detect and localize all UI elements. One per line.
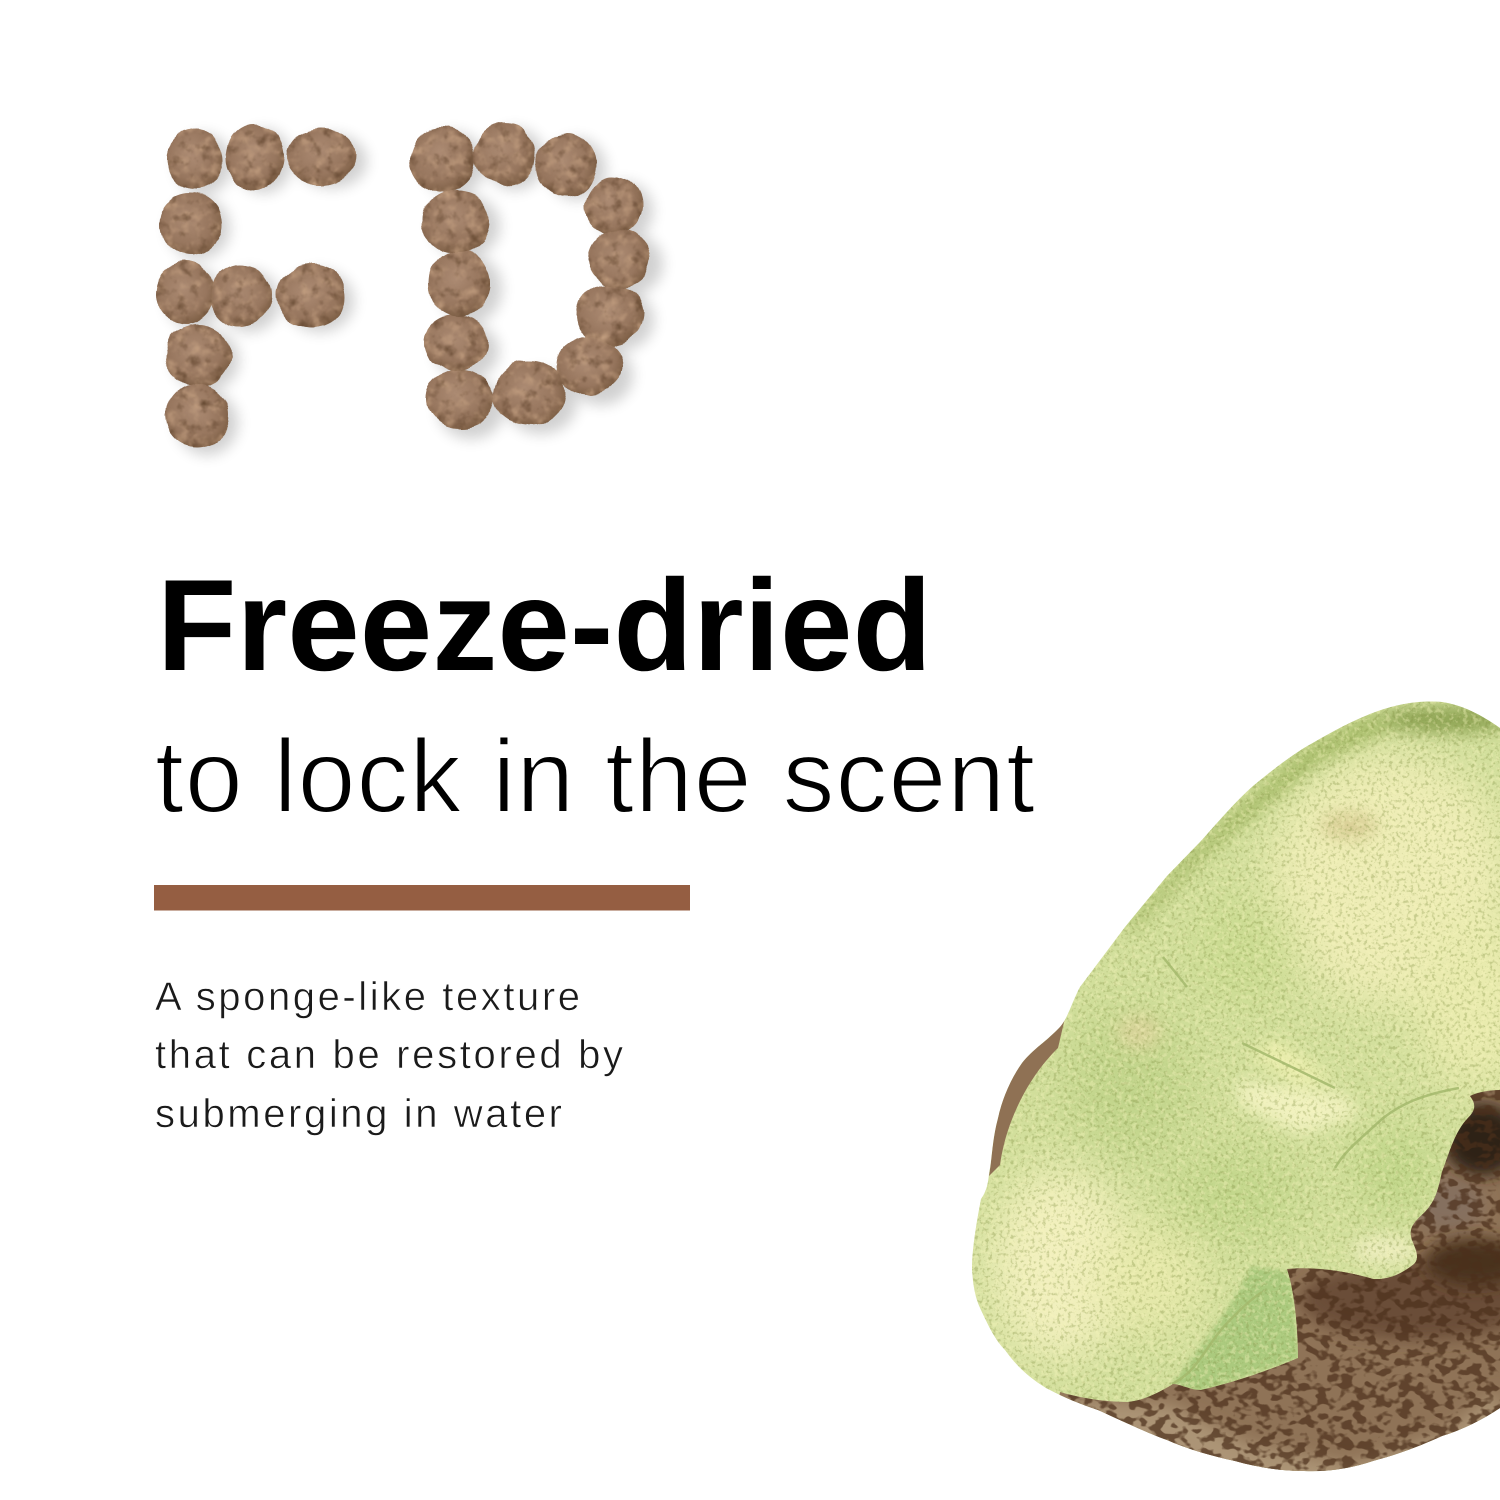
brown rim on left edge xyxy=(989,1020,1064,1176)
ridges xyxy=(1163,957,1459,1384)
nuggets forming F and D xyxy=(156,123,651,447)
body text: A sponge-like texture xyxy=(155,975,580,1019)
brown divider bar xyxy=(154,885,690,910)
sponge texture xyxy=(960,690,1500,1480)
body text: submerging in water xyxy=(155,1092,562,1136)
subheading: to lock in the scent: to lock in the scent xyxy=(155,719,1035,835)
body text: that can be restored by xyxy=(155,1033,623,1077)
brown skin xyxy=(1060,1090,1500,1472)
FD letters made of brown nuggets xyxy=(156,123,663,455)
green patch xyxy=(1172,1266,1299,1392)
body text xyxy=(155,975,623,1136)
freeze-dried food chunk cross-section xyxy=(960,690,1500,1500)
heading: Freeze-dried: Freeze-dried xyxy=(157,552,932,698)
